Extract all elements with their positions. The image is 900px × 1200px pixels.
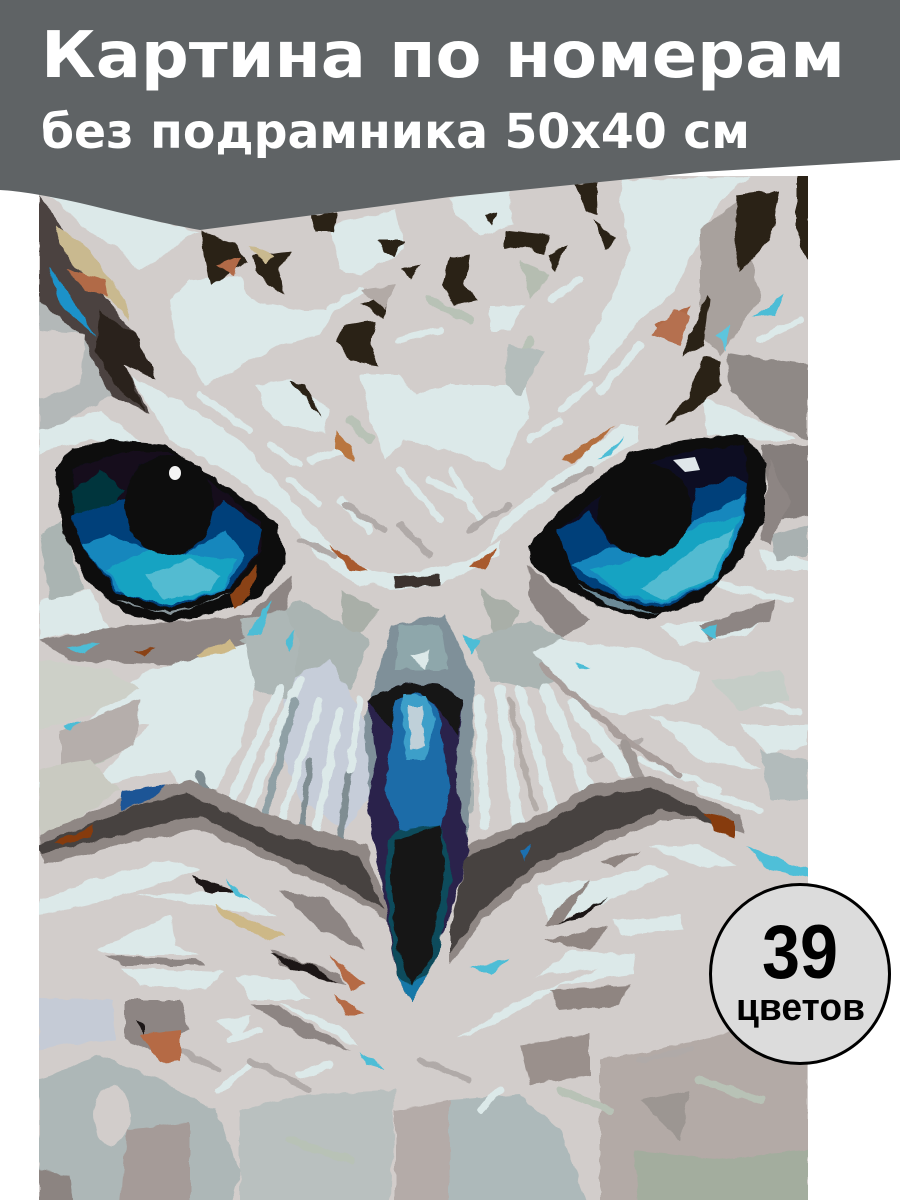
- dark band under left feathers: [39, 780, 395, 925]
- right eye: [528, 435, 765, 620]
- feather fan right: [470, 640, 808, 825]
- left eye: [55, 440, 287, 622]
- subtitle: без подрамника 50х40 см: [41, 104, 750, 160]
- shadow around eyes: [40, 482, 781, 666]
- feather texture strokes: [39, 280, 800, 1160]
- beak: [367, 625, 470, 1003]
- owl painting: [39, 176, 808, 1200]
- grey mound above beak: [364, 614, 475, 838]
- lower tone areas: [39, 998, 808, 1200]
- right eye highlight: [673, 457, 700, 472]
- lower right feathers: [457, 845, 738, 1038]
- title: Картина по номерам: [41, 19, 845, 93]
- badge: colour count: 39: [762, 910, 838, 995]
- forehead light patches: [39, 176, 808, 645]
- brown accents under eye: [132, 545, 498, 658]
- forehead tan and green accents: [216, 246, 690, 632]
- badge: colour count: [710, 884, 890, 1064]
- forehead dark speckles: [202, 182, 615, 418]
- upper-right dark feather marks: [598, 176, 808, 560]
- lower left feathers: [39, 860, 385, 1070]
- dark band under right feathers: [450, 775, 808, 965]
- feather fan left: [39, 610, 375, 840]
- cheek tones under eyes: [40, 520, 590, 690]
- upper-left feather edge: [39, 195, 157, 430]
- badge: colour count: цветов: [736, 987, 865, 1029]
- small blue accents: [65, 600, 718, 730]
- left eye highlight: [169, 466, 181, 480]
- header banner: [0, 0, 900, 230]
